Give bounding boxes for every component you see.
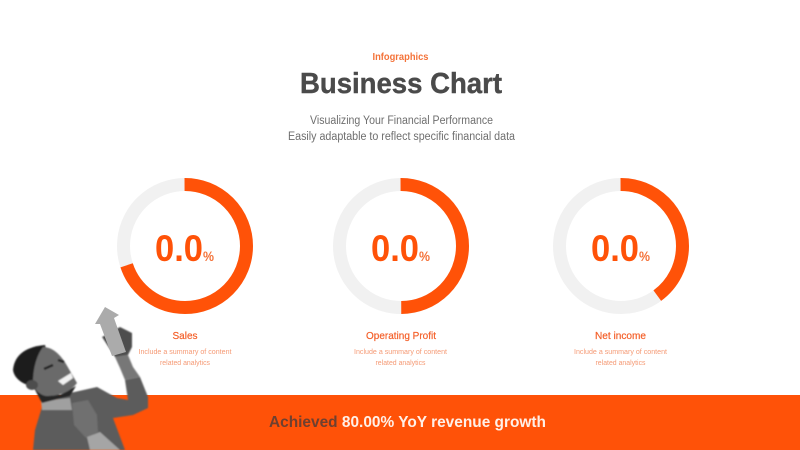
shirt and raised arm [33,377,148,450]
description: operating profit: related analytics [376,360,426,367]
shirt placket [87,432,120,450]
banner text: Achieved 80.00% YoY revenue growth [269,414,546,431]
collar [41,398,72,410]
donut chart: operating profit [340,184,462,308]
raised forearm and watch [115,355,140,380]
donut chart: net income [560,184,682,308]
banner background [0,395,800,450]
subtitle [288,115,516,143]
value: net income: 0.0 [591,228,639,269]
description: operating profit: Include a summary of content [354,349,447,356]
panel: net income [560,184,682,367]
icon: gray up arrow [95,307,126,356]
label: sales: Sales [172,330,198,342]
donut chart: sales [124,184,246,308]
panel: sales [124,184,246,367]
subtitle: Visualizing Your Financial Performance [310,115,493,127]
ear [26,380,38,390]
raised hand [102,327,132,357]
eyebrow label: Infographics [372,52,429,63]
subtitle: Easily adaptable to reflect specific financial data [288,131,516,143]
description: sales: related analytics [160,360,210,367]
description: net income: Include a summary of content [574,349,667,356]
description: sales [138,349,232,367]
neck and beard [34,386,76,403]
description: net income [574,349,667,367]
percent sign: net income: % [639,248,650,264]
percent sign: operating profit: % [419,248,430,264]
panel: operating profit [340,184,462,367]
fist on chest [72,400,98,438]
face [33,347,77,396]
label: net income: Net income [595,330,646,342]
hair [13,345,50,388]
description: net income: related analytics [596,360,646,367]
label: operating profit: Operating Profit [366,330,436,342]
percent sign: sales: % [203,248,214,264]
eyes and brow [44,360,64,369]
description: sales: Include a summary of content [138,349,232,356]
photo: smiling man holding arrow [13,327,148,450]
description: operating profit [354,349,447,367]
value: sales: 0.0 [155,228,203,269]
value: operating profit: 0.0 [371,228,419,269]
smile [58,373,73,385]
title: Business Chart [300,68,502,100]
